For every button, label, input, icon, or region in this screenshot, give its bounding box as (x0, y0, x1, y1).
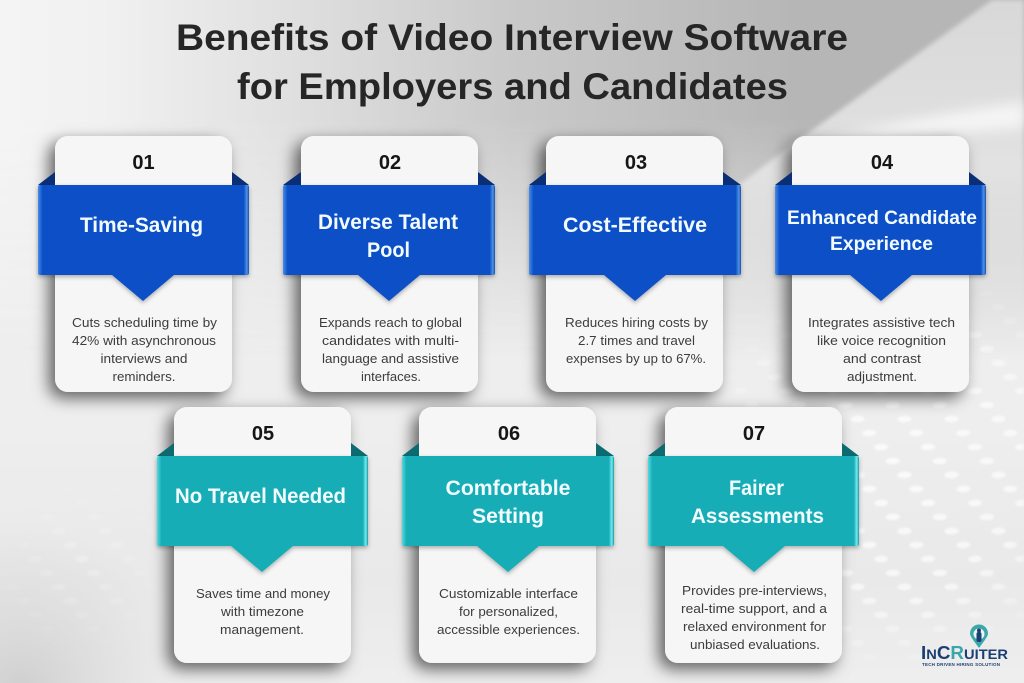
description 02 (319, 316, 462, 384)
number 07: 07 (743, 423, 765, 445)
heading 04 (787, 207, 977, 255)
title: for Employers and Candidates (237, 66, 788, 107)
description 04 (808, 316, 955, 384)
heading 04: Enhanced Candidate (787, 207, 977, 229)
description 03: Reduces hiring costs by (565, 316, 709, 330)
description 04: and contrast (843, 352, 922, 366)
heading 06: Comfortable (446, 477, 570, 500)
ribbon folds 04 (775, 172, 986, 185)
description 06: Customizable interface (439, 587, 578, 601)
description 07 (681, 584, 827, 652)
description 02: Expands reach to global (319, 316, 462, 330)
heading 07: Fairer (729, 477, 784, 500)
logo wordmark: INCRUITER (921, 643, 1008, 663)
heading 02 (318, 211, 458, 262)
card 03: Cost-Effective (529, 136, 741, 392)
description 01: reminders. (112, 370, 176, 384)
ribbon folds 03 (529, 172, 741, 185)
number 01: 01 (132, 152, 155, 174)
description 01: Cuts scheduling time by (72, 316, 218, 330)
logo tagline: TECH DRIVEN HIRING SOLUTION (922, 662, 1000, 667)
description 06: accessible experiences. (437, 623, 580, 637)
description 02: candidates with multi- (322, 334, 459, 348)
logo: InCruiter (921, 625, 1008, 667)
description 07: Provides pre-interviews, (682, 584, 827, 598)
heading 04: Experience (830, 233, 933, 255)
heading 06: Setting (472, 505, 544, 528)
description 06: for personalized, (459, 605, 558, 619)
description 07: real-time support, and a (681, 602, 827, 616)
description 02: interfaces. (361, 370, 421, 384)
description 01: interviews and (100, 352, 188, 366)
ribbon folds 02 (283, 172, 495, 185)
ribbon folds 06 (402, 443, 614, 456)
ribbon 04 (775, 185, 986, 301)
number 06: 06 (498, 423, 520, 445)
card 05: No Travel Needed (157, 407, 368, 663)
heading 01: Time-Saving (80, 214, 203, 237)
icon: location pin (970, 625, 988, 648)
description 07: relaxed environment for (683, 620, 826, 634)
description 03: expenses by up to 67%. (566, 352, 706, 366)
description 04: adjustment. (847, 370, 917, 384)
ribbon folds 07 (648, 443, 859, 456)
ribbon 03 (529, 185, 741, 301)
ribbon 07 (648, 456, 859, 572)
description 05 (196, 587, 331, 637)
card 02: Diverse Talent Pool (283, 136, 495, 392)
description 03: 2.7 times and travel (578, 334, 695, 348)
heading 06 (446, 477, 570, 528)
description 02: language and assistive (322, 352, 459, 366)
ribbon 02 (283, 185, 495, 301)
heading 07: Assessments (691, 505, 824, 528)
card 04: Enhanced Candidate Experience (775, 136, 986, 392)
description 04: Integrates assistive tech (808, 316, 955, 330)
description 04: like voice recognition (817, 334, 946, 348)
heading 03: Cost-Effective (563, 214, 707, 237)
card 07: Fairer Assessments (648, 407, 859, 663)
description 01: 42% with asynchronous (72, 334, 216, 348)
heading 05: No Travel Needed (175, 485, 346, 508)
heading 07 (691, 477, 824, 528)
title: Benefits of Video Interview Software (176, 17, 848, 58)
ribbon 05 (157, 456, 368, 572)
description 07: unbiased evaluations. (690, 638, 820, 652)
description 03 (565, 316, 709, 366)
description 05: management. (220, 623, 304, 637)
ribbon folds 05 (157, 443, 368, 456)
description 06 (437, 587, 580, 637)
number 02: 02 (379, 152, 401, 174)
description 01 (72, 316, 218, 384)
number 04: 04 (871, 152, 894, 174)
ribbon 06 (402, 456, 614, 572)
title (176, 17, 848, 107)
description 05: Saves time and money (196, 587, 331, 601)
heading 02: Diverse Talent (318, 211, 458, 234)
card 01: Time-Saving (38, 136, 249, 392)
ribbon 01 (38, 185, 249, 301)
heading 02: Pool (367, 239, 410, 262)
card 06: Comfortable Setting (402, 407, 614, 663)
ribbon folds 01 (38, 172, 249, 185)
number 03: 03 (625, 152, 647, 174)
description 05: with timezone (220, 605, 304, 619)
number 05: 05 (252, 423, 274, 445)
